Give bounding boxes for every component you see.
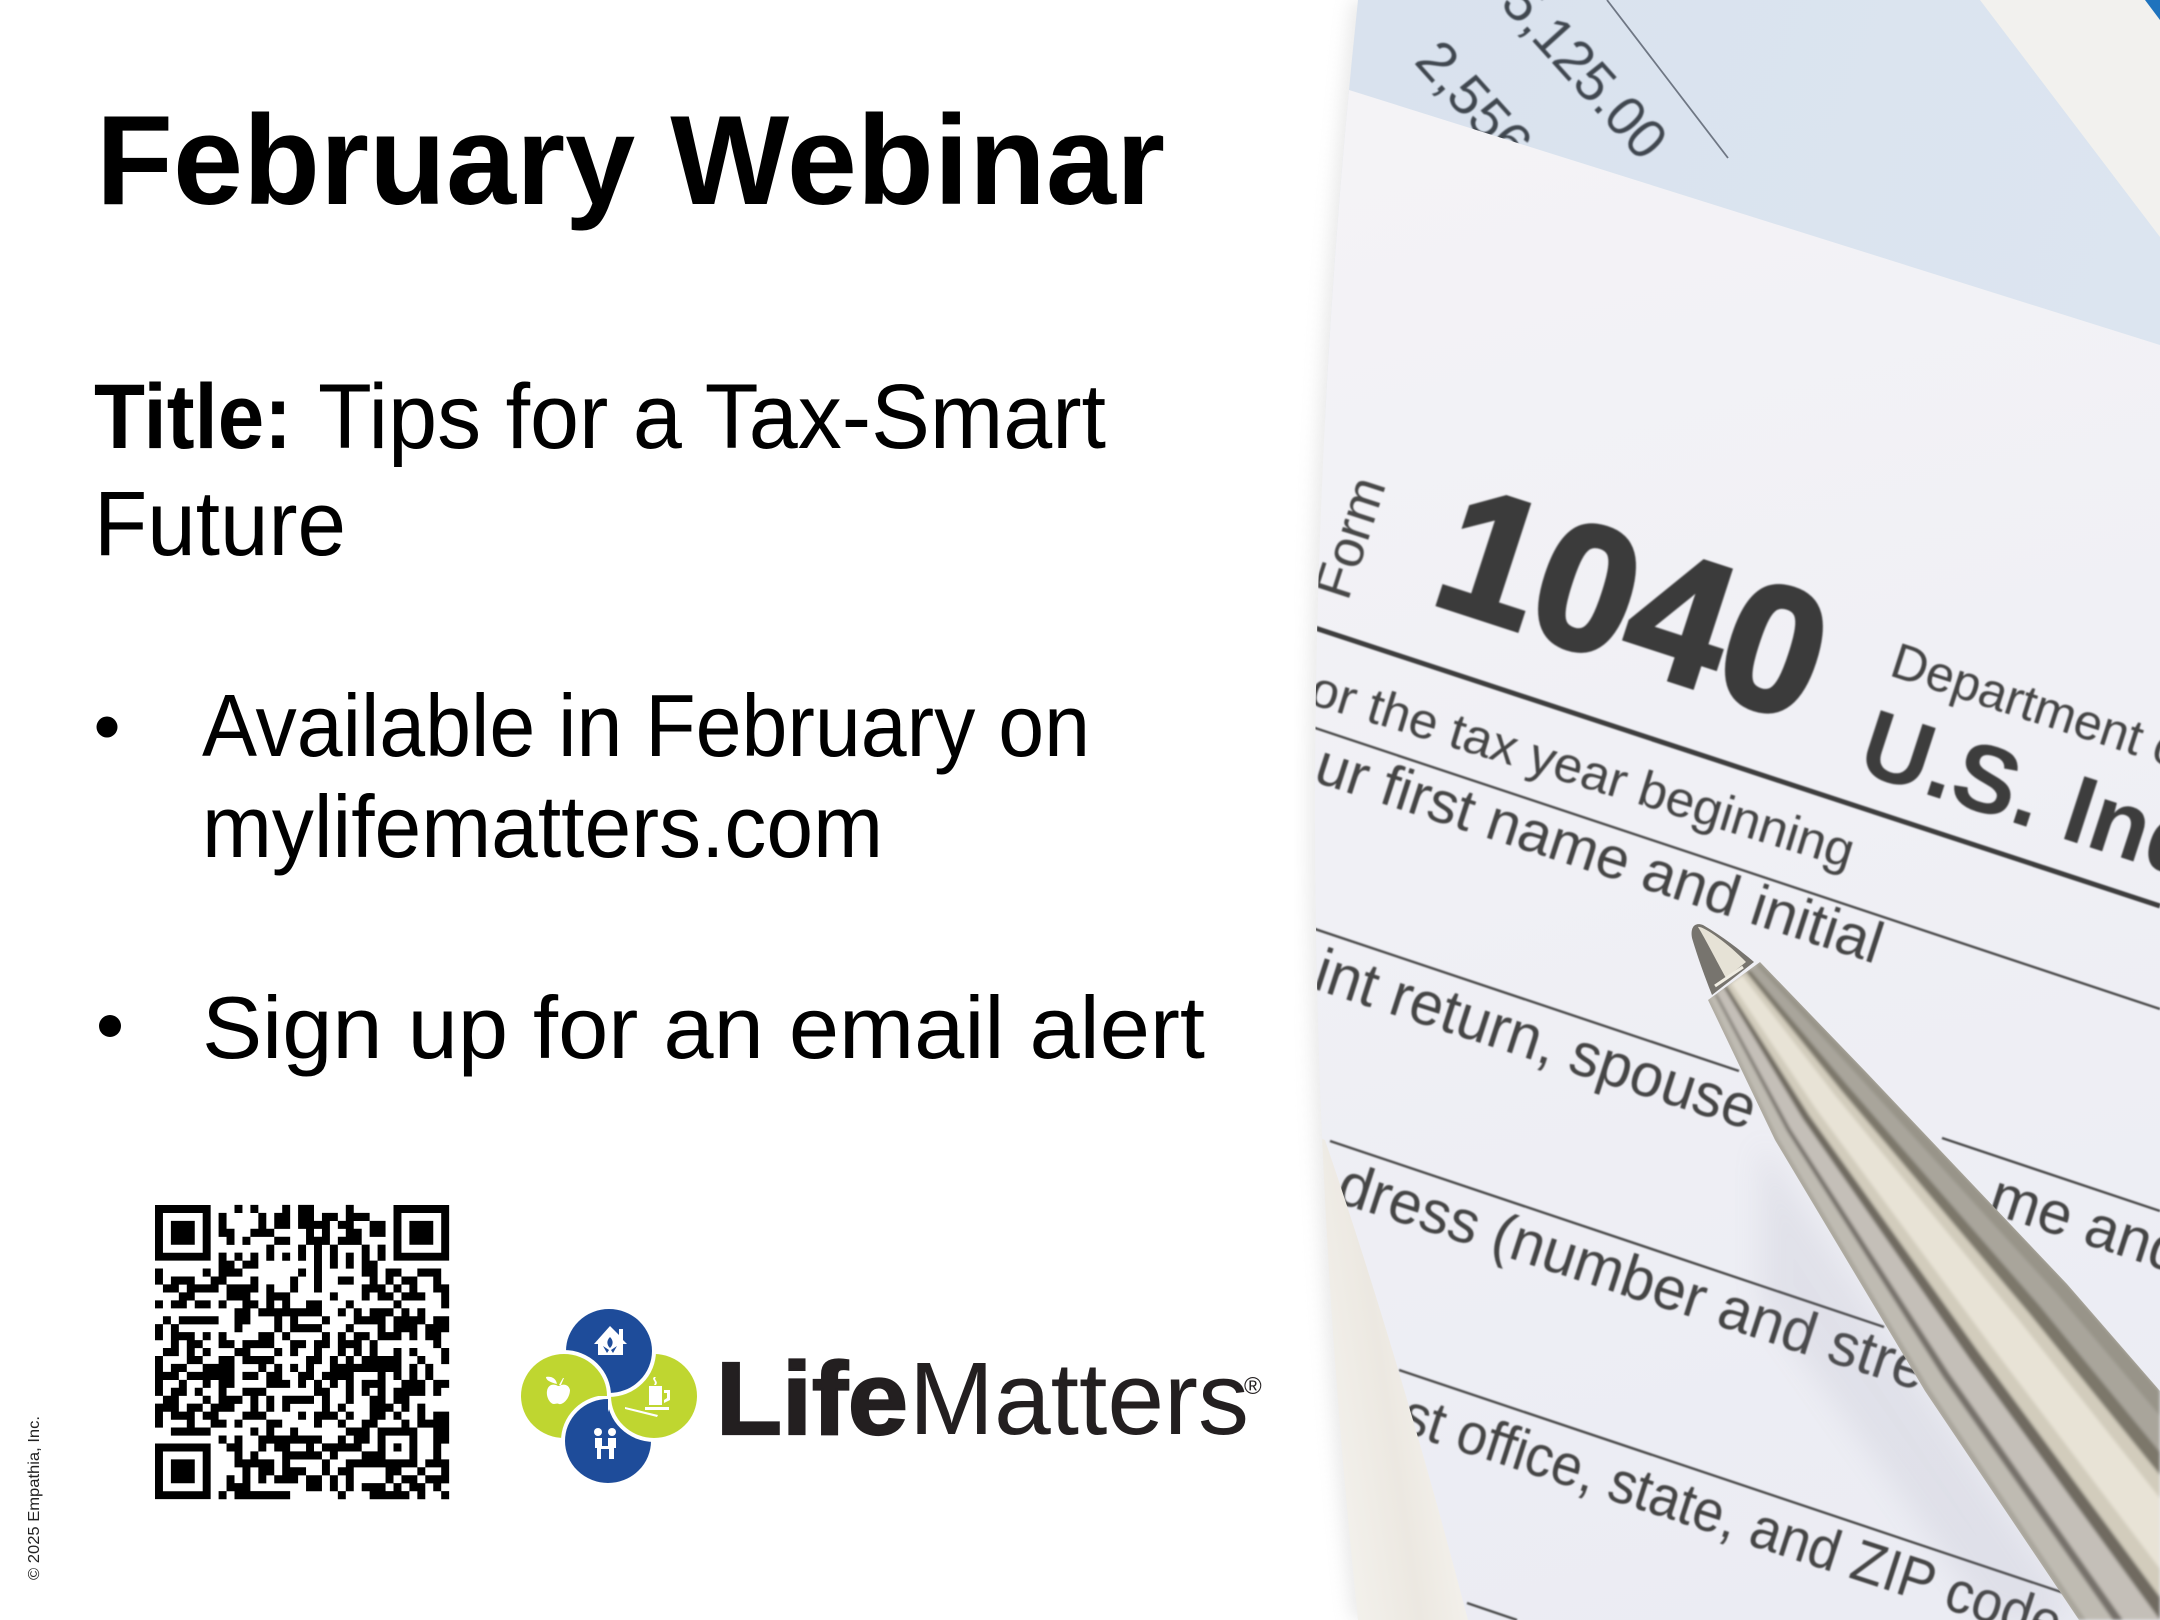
email alert line: Sign up for an email alert xyxy=(202,978,1205,1077)
rules xyxy=(1300,723,2160,1620)
photo edge shadow xyxy=(1309,0,1380,1620)
pen shadow xyxy=(1766,1183,2054,1613)
bullet: email alert xyxy=(99,978,1205,1077)
photo: tax form and pen xyxy=(1260,0,2160,1620)
form label: Form xyxy=(1303,470,1398,606)
icon: mug and pencil xyxy=(625,1377,670,1417)
LifeMatters logo xyxy=(519,1307,1262,1485)
wordmark: Matters: Matters xyxy=(909,1341,1249,1456)
cream paper corner xyxy=(1980,0,2160,237)
form 1040 paper xyxy=(1260,62,2160,1620)
line text: tax year: or the tax year beginning xyxy=(1304,660,1861,879)
petal: top blue xyxy=(564,1307,654,1395)
petal: left green xyxy=(519,1352,609,1440)
form number: 1040 xyxy=(1416,448,1852,759)
pen barrel xyxy=(1690,950,2160,1620)
cream paper lower left xyxy=(1322,1139,1468,1620)
webinar name line 1: Tips for a Tax-Smart xyxy=(318,366,1106,468)
blue statement paper xyxy=(1349,0,2160,345)
statement rule line xyxy=(1607,0,1728,158)
wordmark: Life: Life xyxy=(716,1341,908,1456)
title label: Title: xyxy=(94,366,292,468)
line text: joint return: int return, spouse xyxy=(1307,936,1765,1143)
QR code xyxy=(155,1205,449,1499)
subtitle text block xyxy=(94,366,1106,575)
logo mark xyxy=(519,1307,699,1485)
petal: bottom blue xyxy=(563,1397,653,1485)
registered mark: ® xyxy=(1244,1373,1262,1400)
icon: house xyxy=(594,1326,627,1355)
petal: right green xyxy=(609,1352,699,1440)
line text: first name: ur first name and initial xyxy=(1308,732,1891,976)
logo wordmark xyxy=(716,1341,1262,1456)
webinar name line 2: Future xyxy=(94,473,346,575)
pen nib xyxy=(1692,924,1754,995)
petal: bottom blue overlap xyxy=(561,1396,608,1442)
bullet dot xyxy=(99,1015,121,1037)
thick rule xyxy=(1300,623,2160,906)
icon: family xyxy=(594,1428,616,1459)
blue sliver top xyxy=(2145,0,2160,20)
statement amount 2: 2,556 xyxy=(1404,28,1545,174)
copyright notice: © 2025 Empathia, Inc. xyxy=(26,1416,43,1580)
pen xyxy=(1690,924,2160,1620)
line text: address: dress (number and stre xyxy=(1330,1150,1936,1403)
bullet dot xyxy=(96,716,118,738)
availability line 2: mylifematters.com xyxy=(202,777,883,876)
icon: apple xyxy=(546,1377,570,1404)
title: February Webinar xyxy=(96,89,1165,231)
availability line 1: Available in February on xyxy=(202,676,1090,775)
bullet: availability xyxy=(96,676,1090,876)
